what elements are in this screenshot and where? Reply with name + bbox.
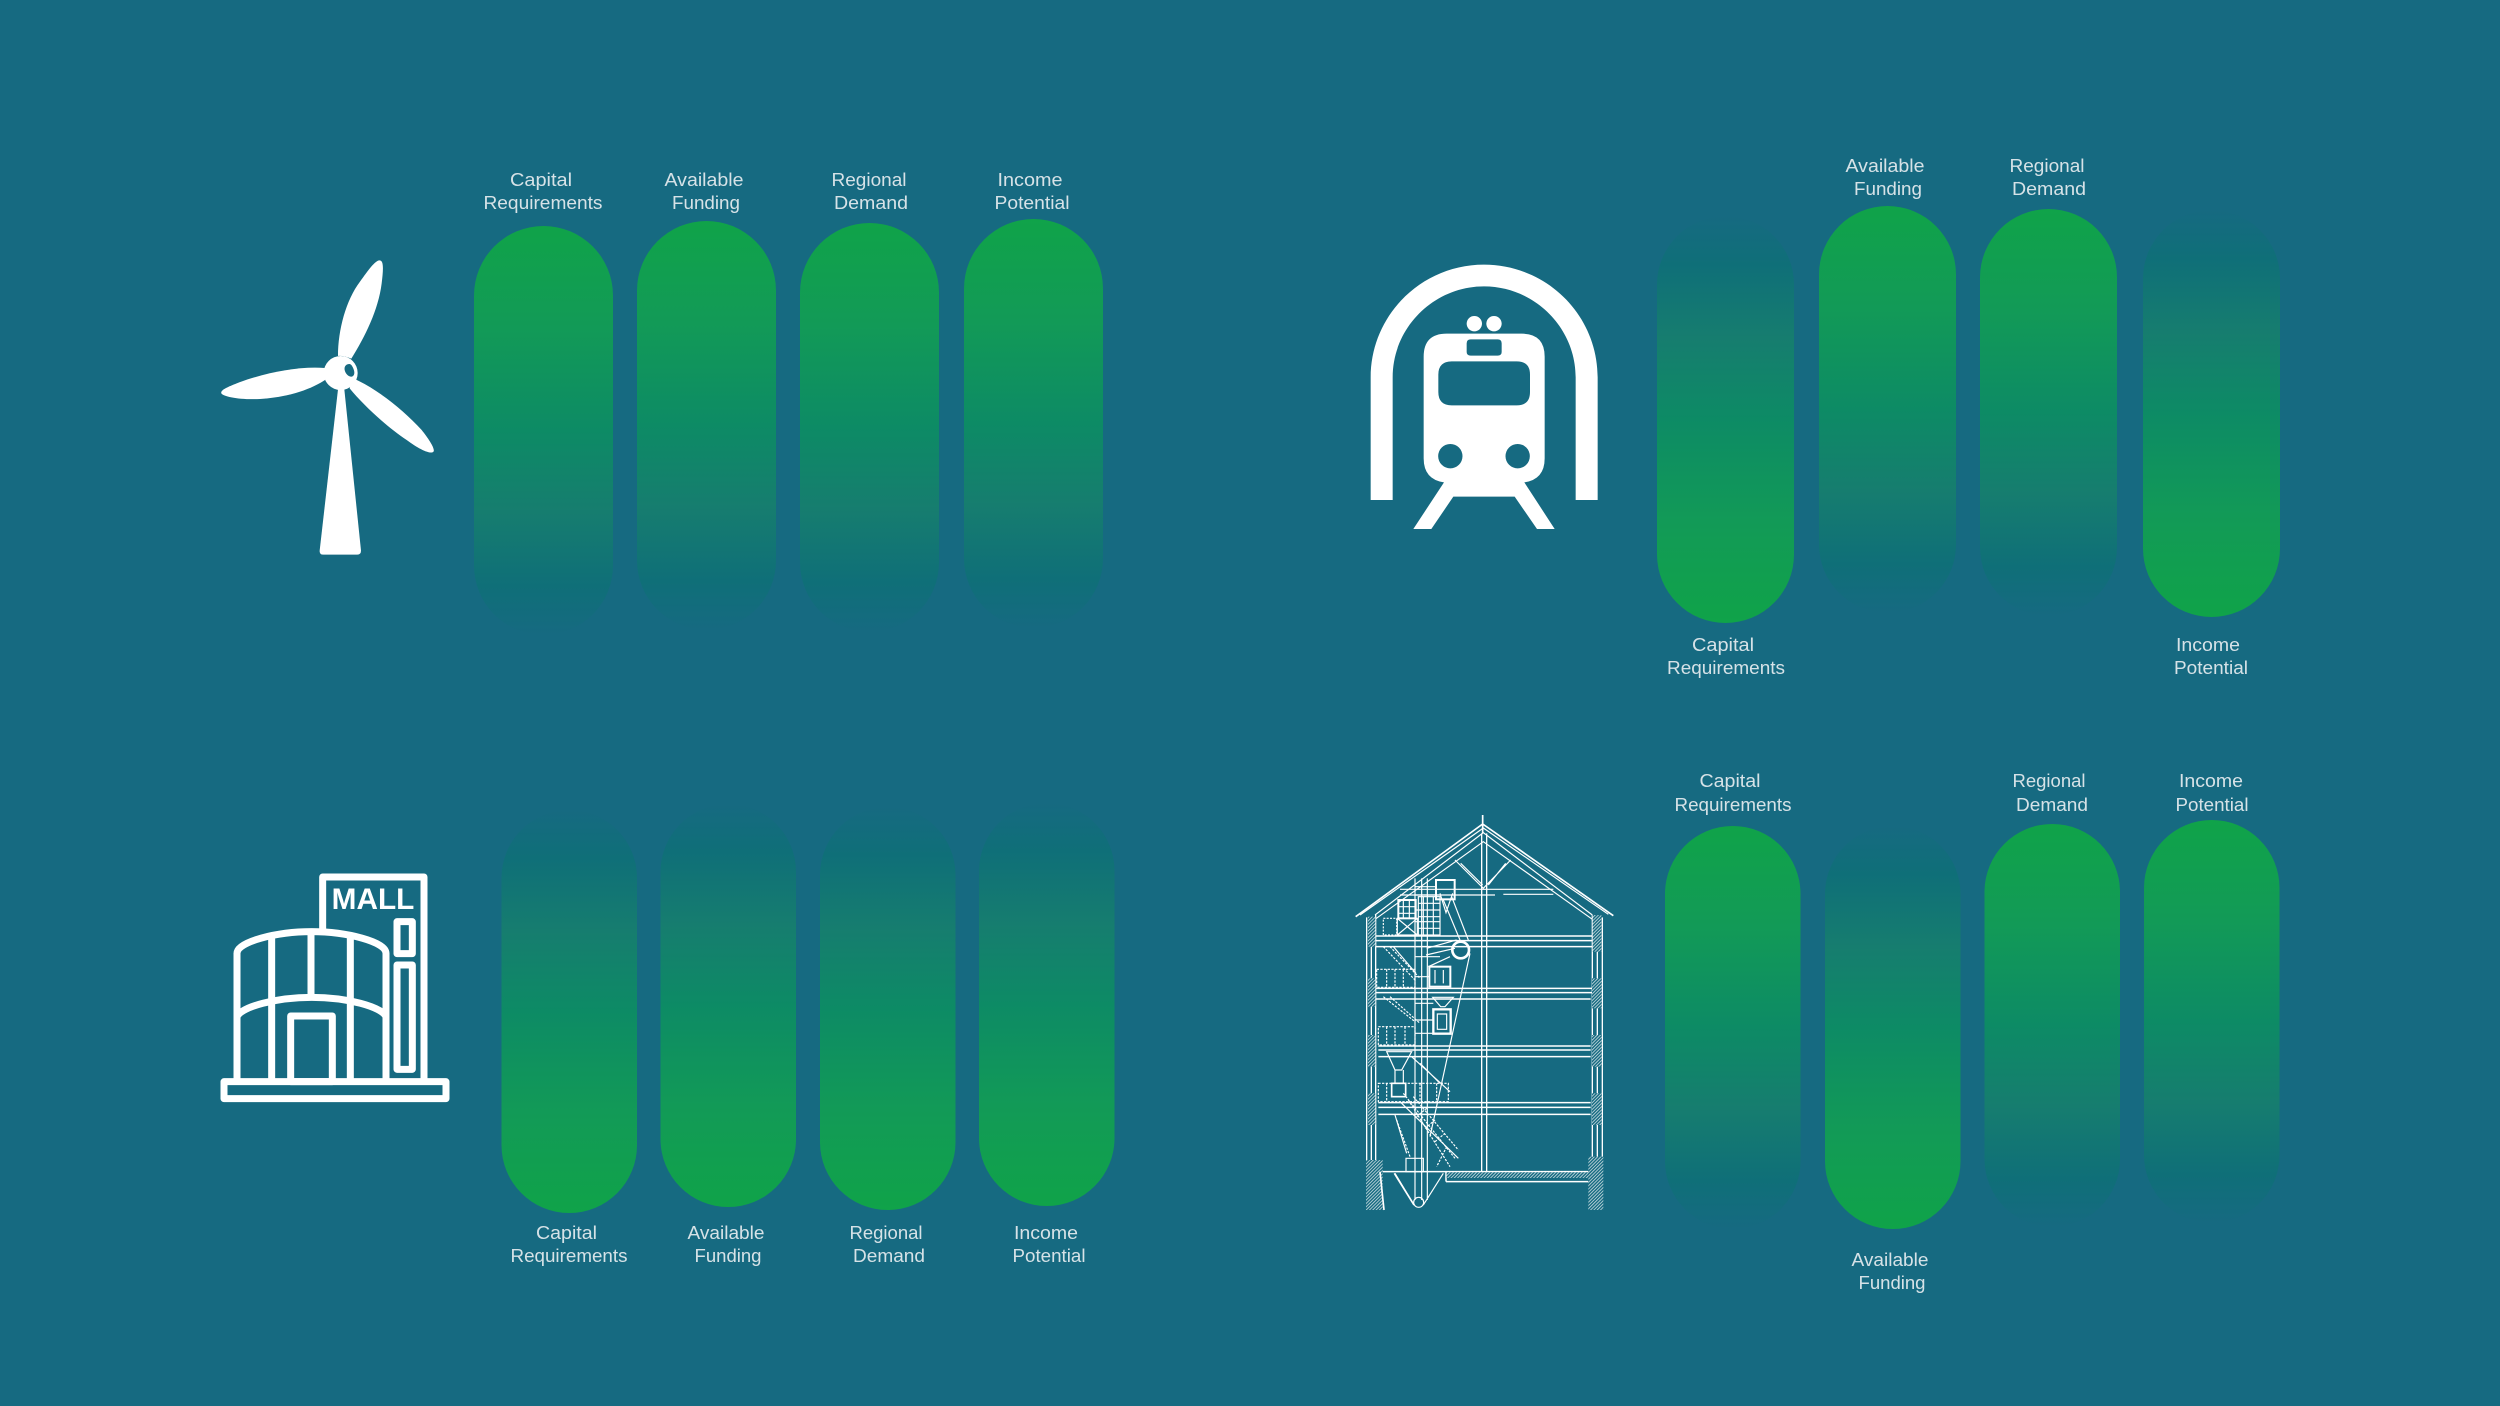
label: Income Potential xyxy=(2174,635,2248,678)
label: Income Potential: Potential xyxy=(2176,795,2248,815)
label: Regional Demand: Demand xyxy=(853,1246,925,1266)
label: Income Potential: Income xyxy=(2176,635,2240,655)
label: Available Funding: Funding xyxy=(1854,179,1922,199)
label: Regional Demand: Demand xyxy=(834,193,908,213)
bar: Income Potential xyxy=(2143,210,2280,617)
bar: Available Funding xyxy=(660,804,796,1207)
label: Capital Requirements xyxy=(1674,771,1792,815)
label: Available Funding xyxy=(664,170,744,213)
label: Income Potential xyxy=(994,170,1070,213)
label: Income Potential: Potential xyxy=(1012,1246,1086,1266)
label: Income Potential: Potential xyxy=(2174,658,2248,678)
label: Income Potential xyxy=(1012,1223,1086,1266)
label: Available Funding xyxy=(1846,156,1924,199)
label: Income Potential: Income xyxy=(1014,1223,1078,1243)
label: Capital Requirements xyxy=(1667,635,1785,678)
bar: Available Funding xyxy=(637,221,776,630)
label: Regional Demand: Regional xyxy=(2010,156,2084,176)
bar: Available Funding xyxy=(1825,826,1960,1229)
label: Capital Requirements: Requirements xyxy=(1667,658,1785,678)
label: Available Funding: Available xyxy=(664,170,744,190)
label: Income Potential xyxy=(2176,771,2248,815)
bar: Capital Requirements xyxy=(1665,826,1800,1229)
bar: Available Funding xyxy=(1819,206,1956,613)
label: Income Potential: Income xyxy=(998,170,1062,190)
icon: wind turbine xyxy=(221,260,434,555)
bar: Capital Requirements xyxy=(474,226,613,635)
label: Available Funding: Funding xyxy=(672,193,740,213)
bar: Capital Requirements xyxy=(502,810,637,1213)
label: Income Potential: Potential xyxy=(994,193,1070,213)
bar: Income Potential xyxy=(964,219,1103,628)
label: Available Funding: Available xyxy=(1846,156,1924,176)
label: Regional Demand xyxy=(832,170,908,213)
label: Available Funding: Available xyxy=(1852,1250,1928,1270)
label: Capital Requirements: Requirements xyxy=(484,193,602,213)
label: Regional Demand: Regional xyxy=(832,170,906,190)
label: Regional Demand: Regional xyxy=(2012,771,2086,791)
label: Regional Demand xyxy=(850,1223,925,1266)
bar: Income Potential xyxy=(979,803,1114,1206)
bar: Regional Demand xyxy=(820,807,956,1210)
label: Capital Requirements: Requirements xyxy=(510,1246,628,1266)
label: Available Funding: Funding xyxy=(694,1246,762,1266)
label: Regional Demand: Demand xyxy=(2016,795,2088,815)
bar: Income Potential xyxy=(2144,820,2280,1223)
panel: metro rail xyxy=(1371,156,2280,678)
label: Capital Requirements xyxy=(510,1223,628,1266)
bar: Regional Demand xyxy=(1980,209,2117,616)
label: Regional Demand xyxy=(2012,771,2088,815)
icon: mill building cross-section xyxy=(1356,815,1613,1210)
label: Income Potential: Income xyxy=(2179,771,2243,791)
label: Available Funding xyxy=(688,1223,764,1266)
label: Capital Requirements: Capital xyxy=(510,170,572,190)
label: Regional Demand: Demand xyxy=(2012,179,2086,199)
panel: shopping mall xyxy=(224,803,1114,1266)
bar: Regional Demand xyxy=(800,223,939,632)
label: Available Funding xyxy=(1852,1250,1928,1293)
label: Capital Requirements: Capital xyxy=(536,1223,597,1243)
icon: mall building: MALL xyxy=(332,883,414,916)
label: Capital Requirements: Requirements xyxy=(1674,795,1792,815)
icon: mall building xyxy=(224,877,446,1099)
bar: Capital Requirements xyxy=(1657,216,1794,623)
icon: metro train in tunnel xyxy=(1371,265,1598,529)
bar: Regional Demand xyxy=(1984,824,2120,1227)
label: Regional Demand xyxy=(2010,156,2086,199)
label: Available Funding: Available xyxy=(688,1223,764,1243)
label: Capital Requirements: Capital xyxy=(1700,771,1760,791)
panel: mill building xyxy=(1356,771,2280,1293)
label: Regional Demand: Regional xyxy=(850,1223,922,1243)
label: Capital Requirements xyxy=(484,170,602,213)
label: Capital Requirements: Capital xyxy=(1692,635,1754,655)
label: Available Funding: Funding xyxy=(1858,1273,1926,1293)
panel: wind energy xyxy=(221,170,1103,635)
